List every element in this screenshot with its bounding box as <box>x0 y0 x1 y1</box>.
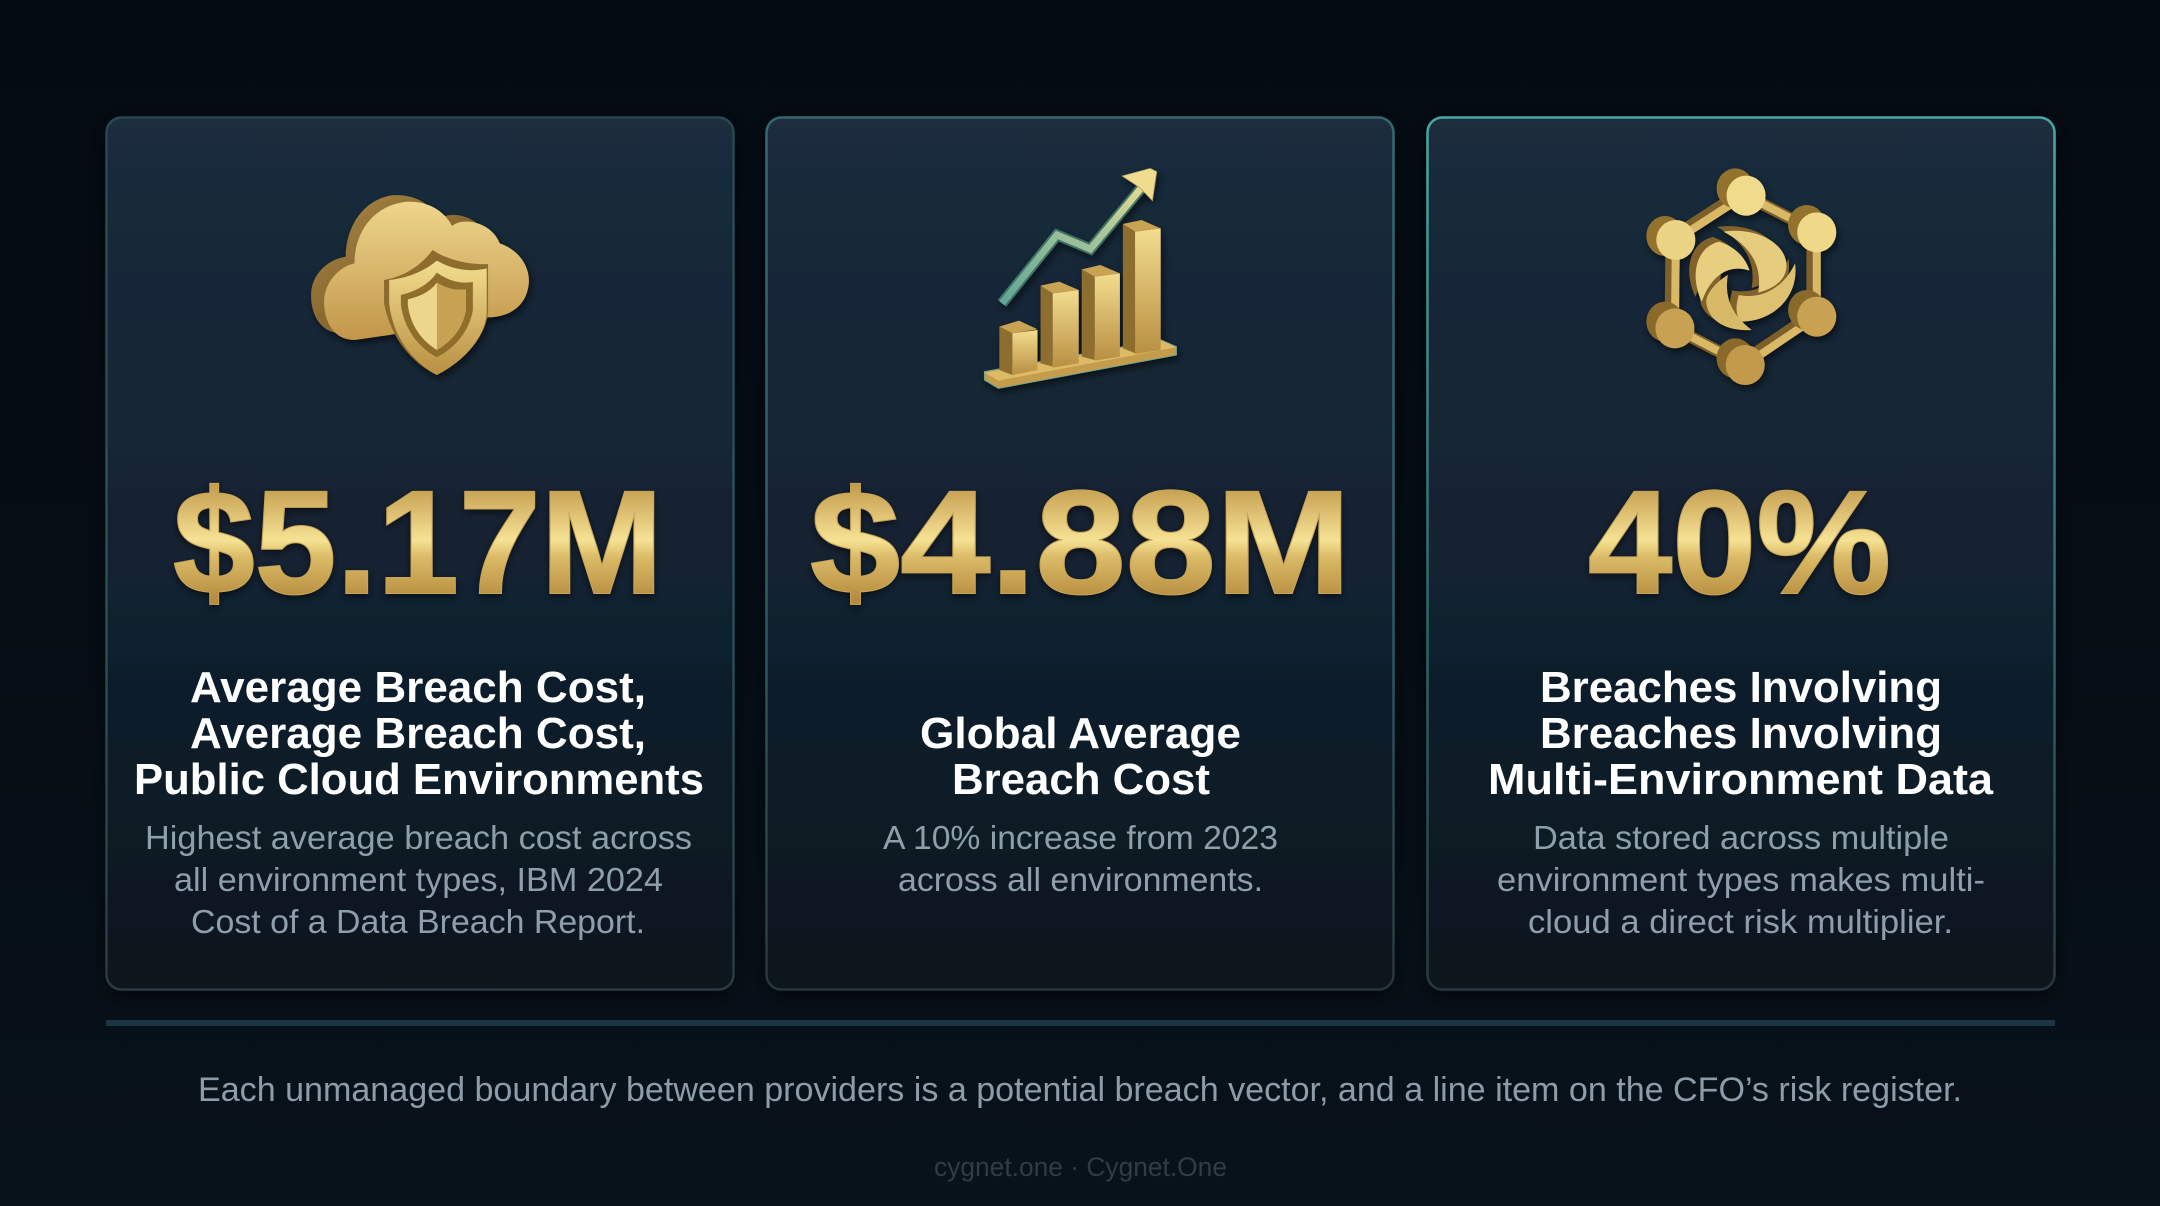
card 3 description <box>1497 819 1985 940</box>
panel: multi-environment breaches <box>1428 118 2054 990</box>
panel: global breach cost <box>766 118 1394 990</box>
card 3 heading <box>1488 663 1994 804</box>
card 2 description: A 10% increase from 2023 <box>883 819 1278 856</box>
card 3 background <box>1428 118 2054 990</box>
card 1 heading <box>134 663 704 804</box>
card 2 heading: Breach Cost <box>952 755 1210 804</box>
card 1 description: Highest average breach cost across <box>145 819 692 856</box>
card 1 description <box>145 819 692 940</box>
source credit: cygnet.one · Cygnet.One <box>934 1152 1227 1182</box>
card 3 heading: Breaches Involving <box>1540 663 1942 712</box>
card 2 heading: Global Average <box>920 709 1241 758</box>
icon: hexagonal node network with swirl <box>1646 168 1836 385</box>
card 3 description: cloud a direct risk multiplier. <box>1528 903 1953 940</box>
card 1 description: Cost of a Data Breach Report. <box>191 903 645 940</box>
card 1 heading: Average Breach Cost, <box>190 663 646 712</box>
card 2 background <box>766 118 1394 990</box>
icon: rising bar chart with arrow <box>985 168 1176 388</box>
stat value: $4.88M <box>810 461 1351 625</box>
card 2 description <box>883 819 1278 898</box>
card 1 description: all environment types, IBM 2024 <box>174 861 663 898</box>
card 2 description: across all environments. <box>898 861 1263 898</box>
card 3 description: Data stored across multiple <box>1533 819 1949 856</box>
footer takeaway: Each unmanaged boundary between providers is a potential breach vector, and a line item on the CFO’s risk register. <box>198 1071 1962 1109</box>
panel: public cloud breach cost <box>106 118 734 990</box>
card 1 heading: Average Breach Cost, <box>190 709 646 758</box>
stat value: $5.17M <box>173 461 663 625</box>
divider <box>106 1020 2055 1026</box>
card 3 description: environment types makes multi- <box>1497 861 1985 898</box>
card 2 heading <box>920 709 1241 804</box>
card 1 background <box>106 118 734 990</box>
icon: gold cloud with shield <box>311 195 529 375</box>
card 3 heading: Multi-Environment Data <box>1488 755 1994 804</box>
card 1 heading: Public Cloud Environments <box>134 755 704 804</box>
card 3 heading: Breaches Involving <box>1540 709 1942 758</box>
stat value: 40% <box>1588 461 1891 625</box>
